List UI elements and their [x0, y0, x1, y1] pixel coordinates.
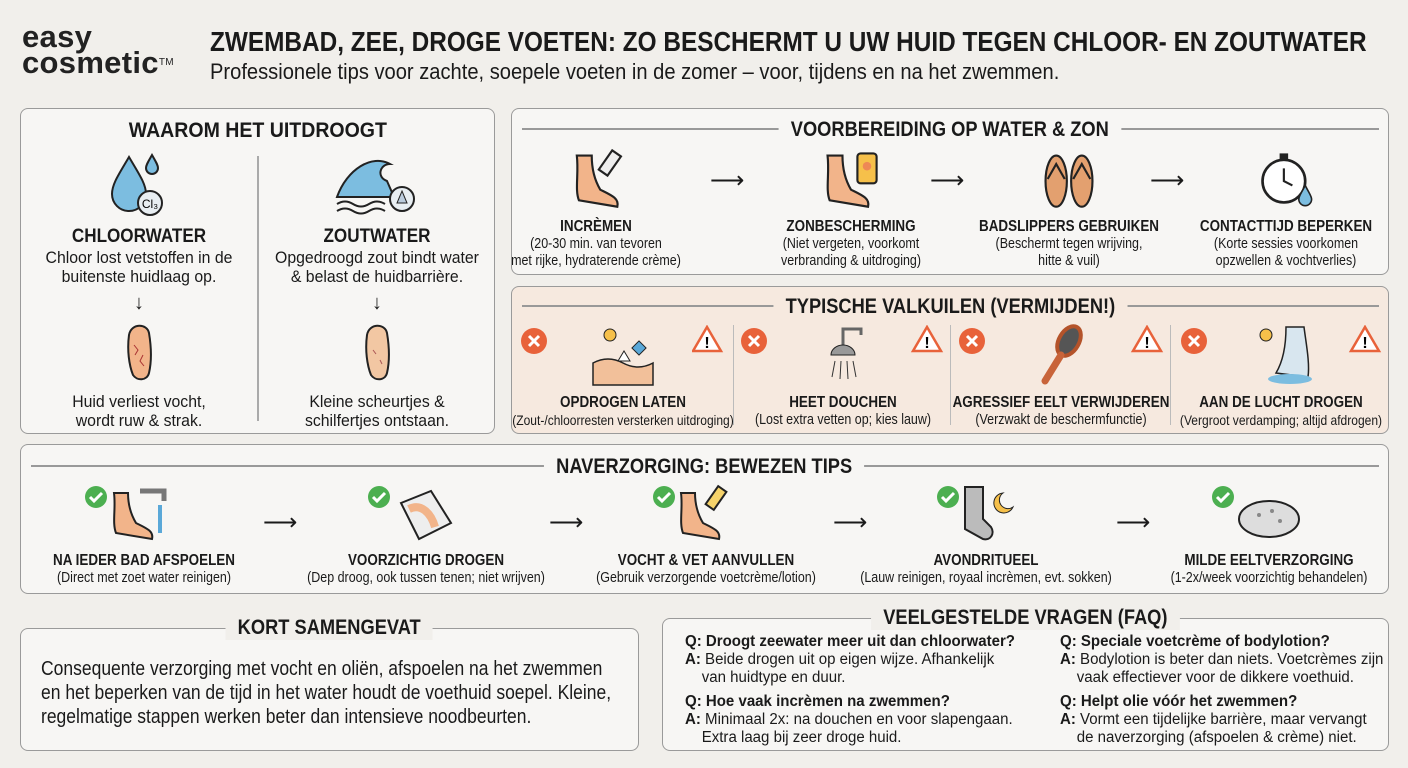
icon: water drops — [111, 153, 163, 216]
icon: check marks — [85, 486, 1234, 508]
icon: x marks — [521, 328, 985, 354]
pitfall: opdrogen laten — [512, 328, 734, 428]
faq left column: Q: Hoe vaak incrèmen na zwemmen? — [685, 693, 950, 710]
faq right column: vaak effectiever voor de dikkere voethuid. — [1077, 669, 1354, 686]
panel: naverzorging — [20, 444, 1389, 594]
step: afspoelen: (Direct met zoet water reinigen) — [57, 570, 231, 586]
step: afspoelen — [53, 488, 235, 586]
panel: typische valkuilen — [511, 286, 1389, 434]
icon: foot under tap — [112, 488, 166, 540]
subtitle: Professionele tips voor zachte, soepele voeten in de zomer – voor, tijdens en na het zwemmen. — [210, 59, 1059, 84]
column: chloorwater — [46, 153, 232, 430]
icon: warning triangles: ! — [924, 335, 930, 352]
faq right column: Q: Helpt olie vóór het zwemmen? — [1060, 693, 1297, 710]
column: zoutwater: Opgedroogd zout bindt water — [275, 248, 479, 267]
faq left column: A: Minimaal 2x: na douchen en voor slapengaan. — [685, 711, 1013, 728]
icon: warning triangles: ! — [1144, 335, 1150, 352]
step: drogen: (Dep droog, ook tussen tenen; niet wrijven) — [307, 570, 545, 586]
faq left column: van huidtype en duur. — [702, 669, 845, 686]
column: chloorwater: Huid verliest vocht, — [72, 392, 206, 411]
panel: voorbereiding: ⟶ — [930, 167, 964, 194]
column: chloorwater: Chloor lost vetstoffen in de — [46, 248, 232, 267]
pitfall: aan de lucht drogen — [1180, 326, 1382, 428]
column: zoutwater — [275, 160, 479, 430]
step: contacttijd: CONTACTTIJD BEPERKEN — [1200, 218, 1372, 235]
step: zonbescherming: (Niet vergeten, voorkomt — [783, 236, 919, 252]
step: badslippers: (Beschermt tegen wrijving, — [996, 236, 1142, 252]
icon: cracked foot — [365, 324, 390, 380]
icon: pumice — [1238, 500, 1300, 538]
step: drogen — [307, 490, 545, 586]
column: chloorwater: wordt ruw & strak. — [76, 411, 202, 430]
faq right column: A: Bodylotion is beter dan niets. Voetcrèmes zijn — [1060, 651, 1383, 668]
step: drogen: VOORZICHTIG DROGEN — [348, 552, 504, 569]
step: vocht & vet — [596, 484, 816, 586]
pitfall: heet douchen: (Lost extra vetten op; kies lauw) — [755, 412, 931, 428]
pitfall: opdrogen laten: (Zout-/chloorresten versterken uitdroging) — [512, 412, 734, 428]
icon: warning triangles: ! — [1362, 335, 1368, 352]
panel: kort samengevat — [20, 628, 639, 751]
icon: warning triangles: ! — [704, 335, 710, 352]
icon: skin with salt — [592, 328, 654, 386]
pitfall: heet douchen: HEET DOUCHEN — [789, 394, 897, 411]
heading: VOORBEREIDING OP WATER & ZON — [791, 118, 1109, 141]
heading: NAVERZORGING: BEWEZEN TIPS — [556, 455, 853, 478]
icon: wave — [336, 160, 415, 214]
faq right column: de naverzorging (afspoelen & crème) niet. — [1077, 729, 1357, 746]
faq right column — [1060, 633, 1383, 747]
panel: naverzorging: ⟶ — [263, 509, 297, 536]
faq left column: Q: Droogt zeewater meer uit dan chloorwater? — [685, 633, 1015, 650]
heading: VEELGESTELDE VRAGEN (FAQ) — [883, 606, 1168, 629]
step: avondritueel: (Lauw reinigen, royaal incrèmen, evt. sokken) — [860, 570, 1112, 586]
column: chloorwater: CHLOORWATER — [72, 226, 206, 247]
pitfall: eelt verwijderen: (Verzwakt de beschermfunctie) — [975, 412, 1147, 428]
pitfall: eelt verwijderen — [953, 324, 1169, 428]
step: badslippers: hitte & vuil) — [1038, 253, 1100, 269]
faq left column: A: Beide drogen uit op eigen wijze. Afhankelijk — [685, 651, 994, 668]
heading: WAAROM HET UITDROOGT — [128, 119, 387, 142]
step: incremen — [511, 148, 681, 269]
step: vocht & vet: VOCHT & VET AANVULLEN — [618, 552, 794, 569]
icon: foot file — [1042, 324, 1083, 384]
step: afspoelen: NA IEDER BAD AFSPOELEN — [53, 552, 235, 569]
title: ZWEMBAD, ZEE, DROGE VOETEN: ZO BESCHERMT U UW HUID TEGEN CHLOOR- EN ZOUTWATER — [210, 26, 1367, 57]
icon: shower — [830, 328, 862, 379]
column: zoutwater: Kleine scheurtjes & — [309, 392, 445, 411]
step: avondritueel: AVONDRITUEEL — [933, 552, 1039, 569]
step: eeltverzorging — [1171, 500, 1367, 586]
step: badslippers — [979, 154, 1159, 269]
column: zoutwater: ZOUTWATER — [323, 226, 431, 247]
arrow: ⟶ — [710, 167, 744, 194]
faq right column: Q: Speciale voetcrème of bodylotion? — [1060, 633, 1330, 650]
step: zonbescherming: ZONBESCHERMING — [786, 218, 916, 235]
step: zonbescherming — [781, 152, 921, 269]
heading: KORT SAMENGEVAT — [238, 616, 421, 639]
step: incremen: INCRÈMEN — [560, 218, 632, 235]
pitfall: opdrogen laten: OPDROGEN LATEN — [560, 394, 686, 411]
panel: waarom het uitdroogt — [20, 108, 495, 434]
column: zoutwater: ↓ — [372, 292, 382, 314]
panel: voorbereiding — [511, 108, 1389, 275]
pitfall: eelt verwijderen: AGRESSIEF EELT VERWIJDEREN — [953, 394, 1169, 411]
column: chloorwater: ↓ — [134, 292, 144, 314]
column: chloorwater: buitenste huidlaag op. — [62, 267, 216, 286]
column: zoutwater: schilfertjes ontstaan. — [305, 411, 449, 430]
panel: naverzorging: ⟶ — [549, 509, 583, 536]
icon: warning triangles — [692, 325, 1382, 352]
icon: foot with sunscreen — [826, 152, 878, 208]
step: badslippers: BADSLIPPERS GEBRUIKEN — [979, 218, 1159, 235]
panel: naverzorging: ⟶ — [833, 509, 867, 536]
icon: sock and moon — [964, 486, 1014, 540]
icon: wet foot — [1260, 326, 1312, 384]
pitfall: aan de lucht drogen: (Vergroot verdamping; altijd afdrogen) — [1180, 412, 1382, 428]
step: incremen: (20-30 min. van tevoren — [530, 236, 662, 252]
step: eeltverzorging: (1-2x/week voorzichtig behandelen) — [1171, 570, 1367, 586]
summary text: en het beperken van de tijd in het water houdt de voethuid soepel. Kleine, — [41, 682, 611, 704]
logo: easy — [22, 19, 92, 54]
summary text: Consequente verzorging met vocht en oliën, afspoelen na het zwemmen — [41, 658, 602, 680]
step: contacttijd — [1200, 153, 1372, 269]
step: avondritueel — [860, 486, 1112, 586]
faq left column — [685, 633, 1015, 747]
icon: flip-flops — [1044, 154, 1094, 208]
column: zoutwater: & belast de huidbarrière. — [291, 267, 463, 286]
heading: TYPISCHE VALKUILEN (VERMIJDEN!) — [785, 295, 1115, 318]
panel: faq — [662, 618, 1389, 751]
icon: towel — [400, 490, 452, 540]
faq left column: Extra laag bij zeer droge huid. — [702, 729, 901, 746]
icon: water drops: Cl₃ — [142, 197, 158, 211]
logo — [22, 19, 174, 80]
summary text — [41, 657, 611, 729]
pitfall: aan de lucht drogen: AAN DE LUCHT DROGEN — [1199, 394, 1363, 411]
icon: dry foot — [127, 324, 152, 380]
step: contacttijd: (Korte sessies voorkomen — [1214, 236, 1358, 252]
summary text: regelmatige stappen werken beter dan intensieve noodbeurten. — [41, 706, 531, 728]
pitfall: heet douchen — [755, 328, 931, 428]
step: vocht & vet: (Gebruik verzorgende voetcrème/lotion) — [596, 570, 816, 586]
icon: foot with cream — [680, 484, 728, 540]
step: eeltverzorging: MILDE EELTVERZORGING — [1184, 552, 1354, 569]
logo: cosmeticTM — [22, 45, 174, 80]
faq right column: A: Vormt een tijdelijke barrière, maar vervangt — [1060, 711, 1367, 728]
step: contacttijd: opzwellen & vochtverlies) — [1216, 253, 1356, 269]
panel: voorbereiding: ⟶ — [1150, 167, 1184, 194]
icon: stopwatch — [1261, 153, 1312, 206]
icon: foot with cream — [576, 148, 622, 208]
step: zonbescherming: verbranding & uitdroging) — [781, 253, 921, 269]
panel: naverzorging: ⟶ — [1116, 509, 1150, 536]
step: incremen: met rijke, hydraterende crème) — [511, 253, 681, 269]
